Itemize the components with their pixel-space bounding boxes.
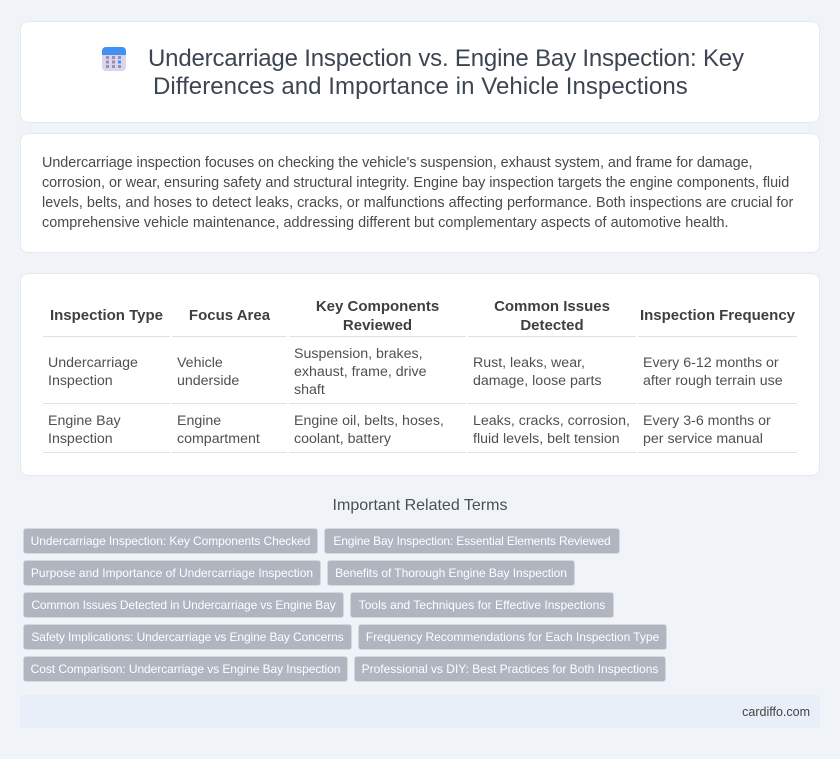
table: Suspension, brakes, — [294, 346, 423, 362]
footer — [20, 695, 820, 728]
table: shaft — [294, 382, 325, 398]
icon: calendar — [102, 47, 126, 71]
table: Inspection — [48, 373, 113, 389]
summary text: comprehensive vehicle maintenance, addressing different but complementary aspects of automotive health. — [42, 215, 729, 231]
summary text — [42, 155, 794, 231]
table: fluid levels, belt tension — [473, 431, 620, 447]
table: Vehicle — [177, 355, 223, 371]
related term tags: Undercarriage Inspection: Key Components Checked — [31, 534, 310, 548]
related term tags: Frequency Recommendations for Each Inspection Type — [366, 630, 659, 644]
related term tags: Common Issues Detected in Undercarriage vs Engine Bay — [31, 598, 336, 612]
summary text: levels, belts, and hoses to detect leaks, cracks, or malfunctions affecting performance. Both inspections are crucial for — [42, 195, 793, 211]
table: Detected — [520, 317, 584, 334]
related term tags: Cost Comparison: Undercarriage vs Engine Bay Inspection — [31, 662, 340, 676]
table: Key Components — [316, 298, 439, 315]
related term tags: Engine Bay Inspection: Essential Elements Reviewed — [333, 534, 611, 548]
table: Rust, leaks, wear, — [473, 355, 585, 371]
table: Engine — [177, 413, 221, 429]
table: per service manual — [643, 431, 763, 447]
table: Every 3-6 months or — [643, 413, 771, 429]
table: exhaust, frame, drive — [294, 364, 426, 380]
table: damage, loose parts — [473, 373, 602, 389]
table: Inspection Type — [50, 307, 163, 324]
related term tags: Safety Implications: Undercarriage vs Engine Bay Concerns — [31, 630, 344, 644]
table: Inspection — [48, 431, 113, 447]
related term tags: Tools and Techniques for Effective Inspections — [359, 598, 605, 612]
table: compartment — [177, 431, 260, 447]
table: Inspection Frequency — [640, 307, 795, 324]
heading: Differences and Importance in Vehicle Inspections — [153, 73, 688, 100]
table: Focus Area — [189, 307, 270, 324]
table: Every 6-12 months or — [643, 355, 779, 371]
table: underside — [177, 373, 239, 389]
related term tags: Benefits of Thorough Engine Bay Inspection — [335, 566, 567, 580]
summary text: Undercarriage inspection focuses on checking the vehicle's suspension, exhaust system, and frame for damage, — [42, 155, 753, 171]
heading: related terms: Important Related Terms — [333, 497, 507, 514]
table: Reviewed — [343, 317, 412, 334]
related term tags — [23, 528, 667, 682]
table: Engine Bay — [48, 413, 121, 429]
heading: Undercarriage Inspection vs. Engine Bay Inspection: Key — [148, 45, 744, 72]
table: Common Issues — [494, 298, 610, 315]
related term tags: Professional vs DIY: Best Practices for Both Inspections — [362, 662, 658, 676]
footer credit: cardiffo.com — [742, 705, 810, 719]
panel: comparison table — [20, 273, 820, 476]
table — [43, 298, 797, 453]
panel: summary — [20, 133, 820, 253]
related term tags: Purpose and Importance of Undercarriage Inspection — [31, 566, 313, 580]
table: after rough terrain use — [643, 373, 783, 389]
table: Engine oil, belts, hoses, — [294, 413, 444, 429]
table: Undercarriage — [48, 355, 138, 371]
title card — [20, 21, 820, 123]
heading — [148, 45, 744, 100]
summary text: corrosion, or wear, ensuring safety and structural integrity. Engine bay inspection targets the engine components, fluid — [42, 175, 789, 191]
table: coolant, battery — [294, 431, 391, 447]
table: Leaks, cracks, corrosion, — [473, 413, 630, 429]
